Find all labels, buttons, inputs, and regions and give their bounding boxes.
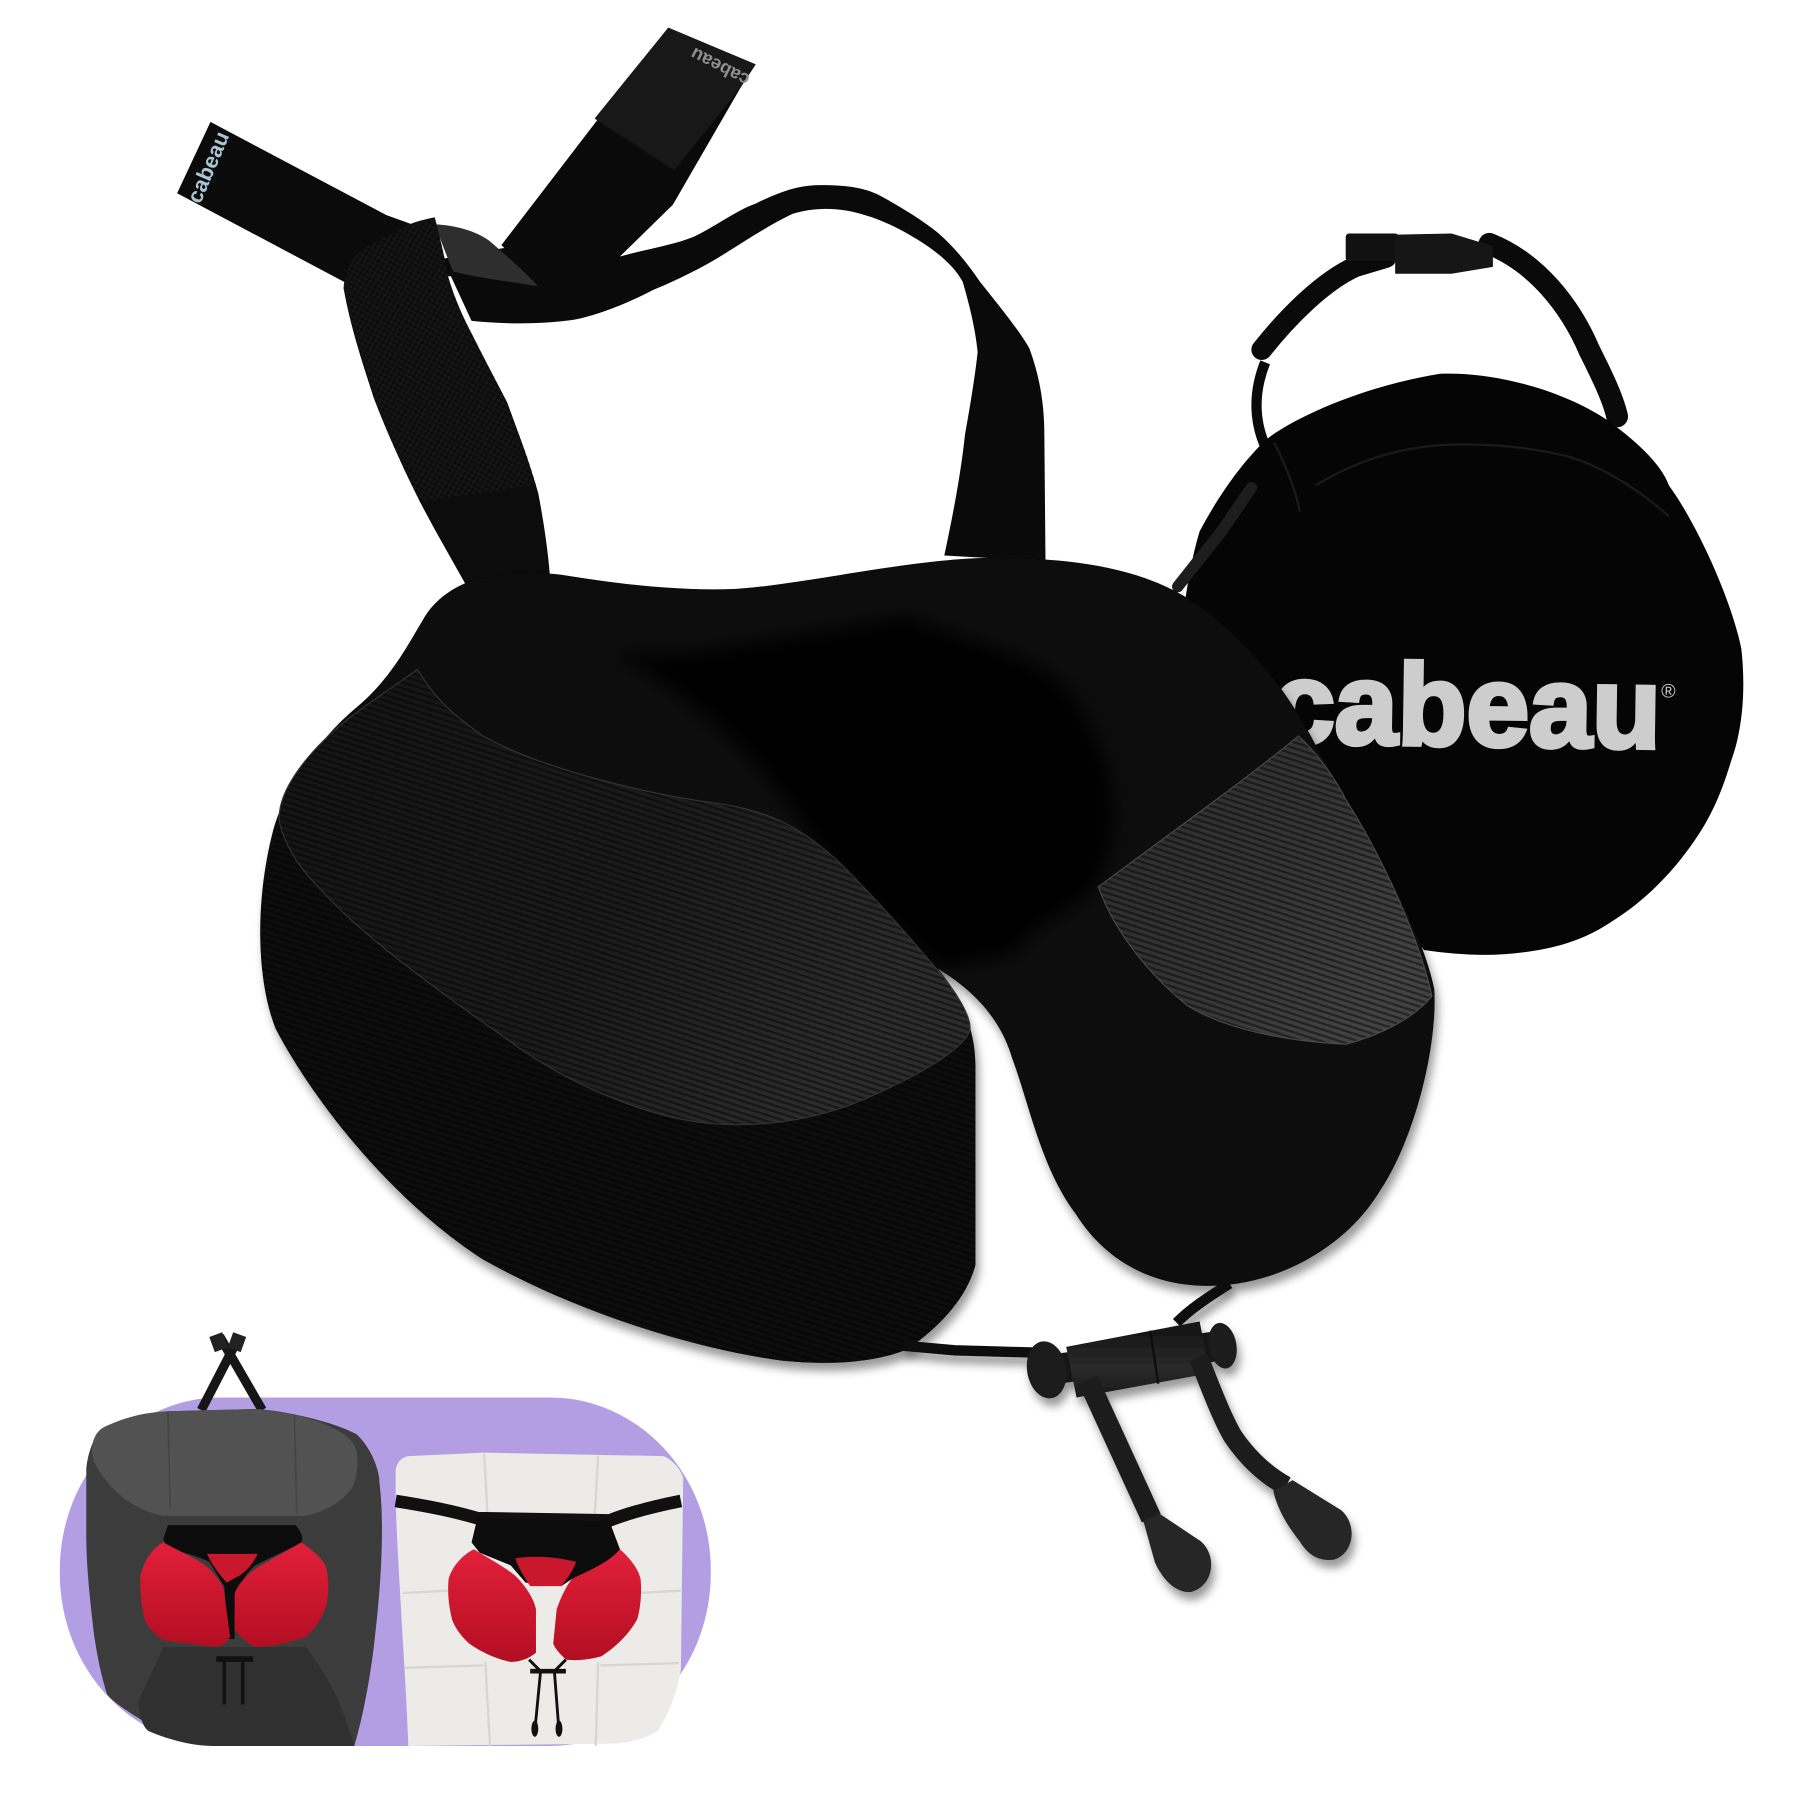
bag handle and buckle — [1257, 233, 1617, 446]
red pillow centre — [207, 1554, 258, 1583]
red centre — [515, 1557, 576, 1586]
seat lower panel — [138, 1647, 354, 1746]
pillow body silhouette — [260, 558, 1435, 1363]
left mesh texture — [279, 669, 970, 1125]
red pillow left lobe — [140, 1542, 230, 1647]
toggle axle — [1042, 1345, 1228, 1371]
zipper pull — [1178, 488, 1251, 587]
left pull cord — [1088, 1380, 1151, 1518]
panel: purple inset background — [60, 1397, 711, 1746]
pillow toggle and cords — [216, 1656, 253, 1705]
adjustment cord and toggle — [903, 1284, 1352, 1592]
icon: hanging strap with buckles — [201, 1332, 262, 1410]
inner neck hollow — [606, 616, 1114, 968]
right mesh texture — [1098, 736, 1432, 1044]
right tail brand tag: cabeau — [687, 44, 753, 91]
cord to pillow — [903, 1284, 1230, 1353]
headrest — [92, 1409, 357, 1516]
left cord tip — [1143, 1514, 1211, 1592]
right mesh panel — [1098, 736, 1432, 1044]
vertical woven strap — [344, 217, 550, 589]
red left lobe — [448, 1549, 536, 1662]
black hanging band — [396, 1501, 681, 1521]
right cord tip — [1273, 1480, 1352, 1560]
long webbing band — [443, 185, 1045, 561]
lower side fabric, left — [261, 822, 975, 1363]
right strap tail — [501, 28, 756, 299]
bag logo: cabeau — [1271, 640, 1662, 773]
toggle barrel — [1066, 1322, 1210, 1397]
toggle right cap — [1205, 1321, 1240, 1371]
red right lobe — [553, 1549, 641, 1660]
grey strap underside — [435, 224, 538, 286]
red pillow right lobe — [235, 1542, 328, 1647]
seat back — [86, 1409, 382, 1746]
left mesh panel — [279, 669, 970, 1125]
toggle and cords — [529, 1660, 566, 1737]
inset: dark car seat with red pillow — [86, 1332, 683, 1746]
inset: white airplane seat with red pillow — [396, 1453, 683, 1746]
left strap tail — [177, 122, 454, 282]
right tail light panel — [595, 28, 756, 170]
carry bag — [1178, 233, 1743, 955]
toggle left cap — [1022, 1338, 1071, 1402]
pillow straps — [177, 28, 1045, 589]
neck pillow — [260, 558, 1435, 1363]
bag logo: ® — [1661, 680, 1676, 703]
white seat back — [396, 1453, 683, 1746]
black pillow collar — [472, 1518, 620, 1586]
bag body — [1184, 374, 1743, 955]
left tail brand tag: cabeau — [182, 128, 234, 207]
right pull cord — [1198, 1357, 1286, 1486]
black pillow collar — [163, 1525, 302, 1639]
